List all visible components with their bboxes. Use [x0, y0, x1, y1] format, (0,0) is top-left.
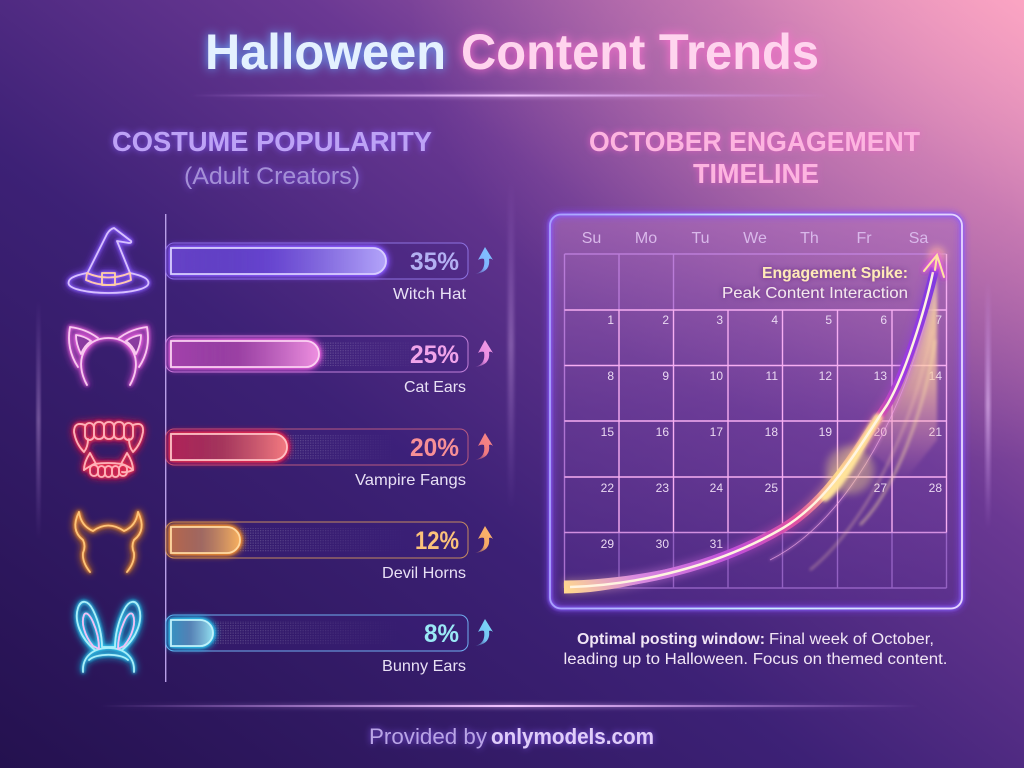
calendar dates: 4	[771, 313, 778, 327]
heading: costume popularity: COSTUME POPULARITY	[112, 126, 432, 157]
calendar dates: 21	[929, 425, 942, 439]
note: optimal posting window: Final week of October,	[769, 631, 934, 648]
row: devil horns	[75, 512, 493, 582]
value: 20%: 20%	[410, 434, 459, 462]
panel: costume popularity chart	[68, 214, 493, 682]
weekday header	[582, 230, 928, 247]
calendar dates: 7	[935, 313, 942, 327]
icon: vampire fangs	[74, 422, 143, 477]
arrow: up red	[475, 433, 493, 460]
bar: bunny ears 8%	[166, 615, 468, 651]
label: bunny ears: Bunny Ears	[382, 658, 466, 675]
calendar dates: 24	[710, 481, 723, 495]
calendar dates: 23	[656, 481, 669, 495]
calendar dates: 18	[765, 425, 778, 439]
label: devil horns: Devil Horns	[382, 565, 466, 582]
calendar dates: 25	[765, 481, 778, 495]
value: 8%: 8%	[424, 620, 459, 648]
heading: october engagement timeline: TIMELINE	[693, 158, 819, 189]
calendar dates: 16	[656, 425, 669, 439]
calendar dates	[601, 313, 942, 551]
calendar dates: 28	[929, 481, 942, 495]
note: optimal posting window: Optimal posting window:	[577, 631, 765, 648]
arrow: up blue	[475, 247, 493, 274]
icon: bunny ears	[77, 602, 140, 672]
weekday header: Tu	[691, 230, 710, 247]
footer: provided by: Provided by	[369, 724, 487, 749]
weekday header: Sa	[909, 230, 928, 247]
calendar dates: 12	[819, 369, 832, 383]
callout: engagement spike: Engagement Spike:	[762, 265, 908, 282]
weekday header: Su	[582, 230, 601, 247]
heading: costume popularity: (Adult Creators)	[184, 163, 360, 190]
calendar dates: 20	[874, 425, 887, 439]
bar: vampire fangs 20%	[166, 429, 468, 465]
icon: witch hat	[68, 228, 148, 293]
weekday header: Mo	[635, 230, 657, 247]
note: optimal posting window: leading up to Halloween. Focus on themed content.	[564, 651, 948, 668]
weekday header: We	[743, 230, 767, 247]
row: cat ears	[69, 327, 493, 396]
calendar dates: 13	[874, 369, 887, 383]
bar: devil horns 12%	[166, 522, 468, 558]
panel: calendar	[550, 214, 962, 608]
calendar dates: 15	[601, 425, 614, 439]
callout: engagement spike: Peak Content Interaction	[722, 285, 908, 302]
note: optimal posting window	[564, 631, 948, 668]
heading: costume popularity	[112, 126, 432, 190]
calendar dates: 14	[929, 369, 942, 383]
value: 25%: 25%	[410, 341, 459, 369]
arrow: up orange	[475, 526, 493, 553]
footer: provided by: onlymodels.com	[491, 724, 654, 749]
title	[205, 24, 819, 80]
arrowhead: spike	[924, 255, 944, 277]
arrow: up cyan	[475, 619, 493, 646]
calendar dates: 8	[607, 369, 614, 383]
calendar dates: 6	[880, 313, 887, 327]
bar: witch hat 35%	[166, 243, 468, 279]
arrow: up pink	[475, 340, 493, 367]
title: Content Trends	[461, 24, 819, 80]
engagement curve	[564, 247, 945, 594]
calendar dates: 19	[819, 425, 832, 439]
weekday header: Fr	[856, 230, 872, 247]
calendar dates: 2	[662, 313, 669, 327]
value: 35%: 35%	[410, 248, 459, 276]
heading: october engagement timeline	[589, 126, 920, 189]
calendar dates: 11	[766, 369, 778, 383]
icon: cat ears	[69, 327, 148, 385]
title: Halloween	[205, 24, 446, 80]
weekday header: Th	[800, 230, 819, 247]
calendar dates: 17	[710, 425, 723, 439]
calendar dates: 1	[607, 313, 614, 327]
row: witch hat	[68, 228, 493, 303]
label: witch hat: Witch Hat	[393, 286, 467, 303]
calendar dates: 27	[874, 481, 887, 495]
calendar dates: 10	[710, 369, 723, 383]
heading: october engagement timeline: OCTOBER ENGAGEMENT	[589, 126, 920, 157]
bar: cat ears 25%	[166, 336, 468, 372]
calendar dates: 31	[710, 537, 723, 551]
footer: provided by	[369, 724, 654, 749]
row: vampire fangs	[74, 422, 493, 489]
value: 12%: 12%	[415, 527, 459, 555]
calendar dates: 5	[825, 313, 832, 327]
calendar dates: 29	[601, 537, 614, 551]
calendar grid	[564, 254, 946, 588]
label: cat ears: Cat Ears	[404, 379, 466, 396]
calendar dates: 3	[716, 313, 723, 327]
calendar dates: 9	[662, 369, 669, 383]
calendar dates: 30	[656, 537, 669, 551]
callout: engagement spike	[722, 265, 908, 302]
row: bunny ears	[77, 602, 493, 675]
calendar dates: 22	[601, 481, 614, 495]
icon: devil horns	[75, 512, 142, 572]
label: vampire fangs: Vampire Fangs	[355, 472, 466, 489]
